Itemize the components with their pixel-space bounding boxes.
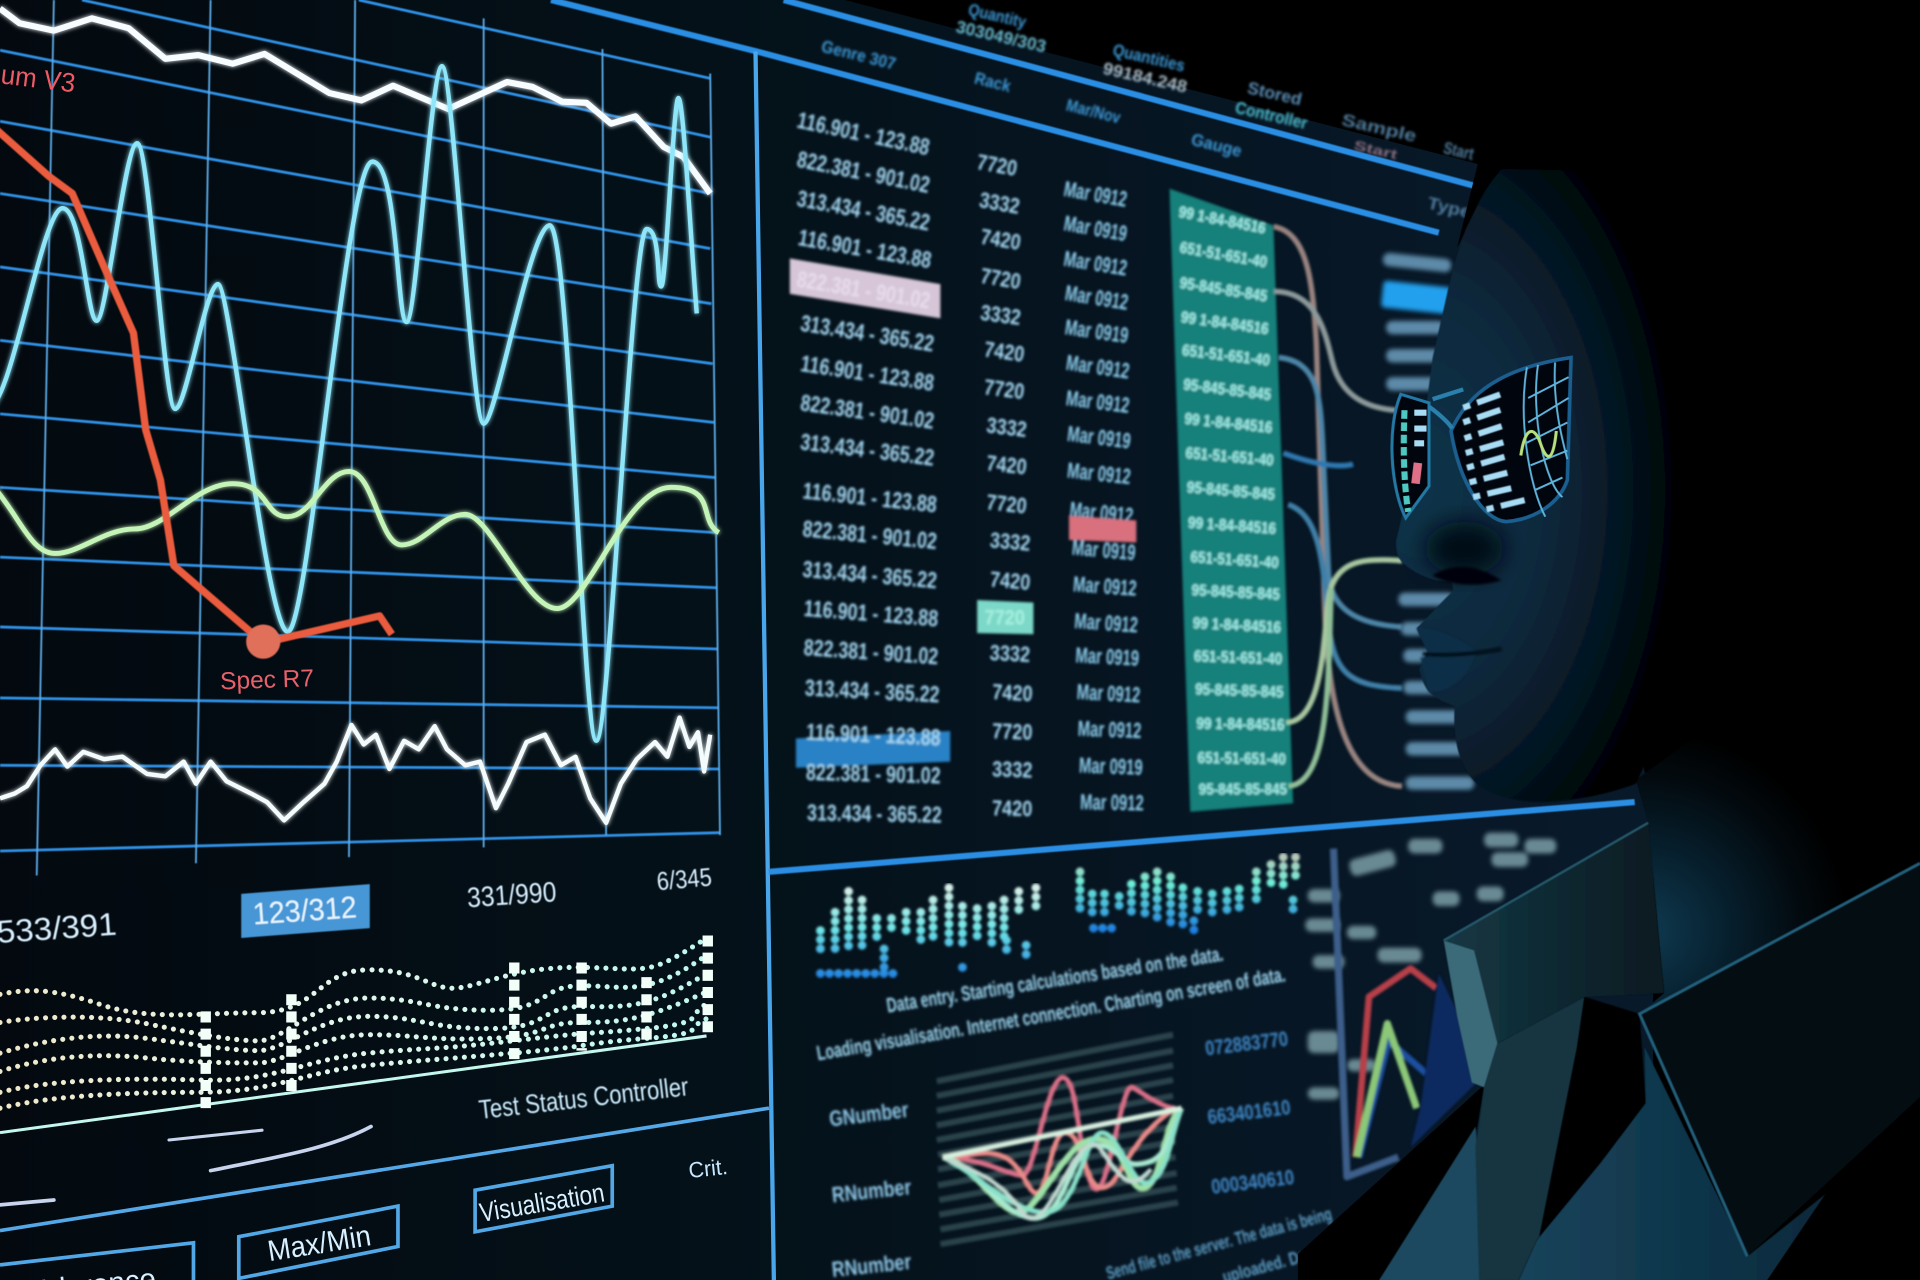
collar: left flap (1444, 823, 1664, 1043)
teal column rows: 99 1-84-84516 (1177, 204, 1267, 238)
chart row values (1204, 1028, 1295, 1199)
column: counts: 7720 (979, 263, 1023, 294)
column: ranges: 313.434 - 365.22 (799, 310, 936, 357)
header column names: Mar/Nov (1064, 95, 1123, 128)
header metrics: Type (1426, 193, 1473, 222)
line: white noisy series (0, 718, 710, 823)
teal column rows: 95-845-85-845 (1179, 275, 1268, 306)
column: ranges: 313.434 - 365.22 (804, 675, 940, 708)
column: ranges: 116.901 - 123.88 (796, 224, 933, 273)
teal column rows: 651-51-651-40 (1185, 445, 1274, 470)
column: dates: Mar 0912 (1063, 280, 1130, 315)
column: dates: Mar 0912 (1077, 716, 1142, 743)
button: Visualisation: Visualisation (477, 1178, 607, 1228)
column: ranges: 116.901 - 123.88 (795, 107, 932, 160)
header metrics: Quantity (966, 0, 1029, 32)
highlighted count (977, 600, 1033, 634)
column: counts: 3332 (989, 527, 1031, 556)
column: counts: 3332 (985, 412, 1028, 442)
marker: red point (246, 624, 280, 659)
side line chart (1333, 849, 1436, 1177)
right lens grid reflection (1524, 362, 1569, 517)
column: ranges: 116.901 - 123.88 (799, 350, 936, 396)
left lens reflection (1404, 410, 1427, 512)
column: dates: Mar 0919 (1075, 642, 1140, 671)
status text (815, 943, 1287, 1065)
black jacket band (1298, 1085, 1484, 1280)
column: ranges: 116.901 - 123.88 (805, 719, 941, 750)
column: ranges: 822.381 - 901.02 (806, 759, 941, 789)
column: dates: Mar 0912 (1076, 679, 1141, 708)
header metrics: Start (1352, 138, 1399, 162)
column: ranges: 822.381 - 901.02 (802, 515, 938, 554)
highlighted count: 7720 (984, 606, 1025, 629)
column: counts: 7720 (983, 374, 1026, 404)
nose shadow (1425, 522, 1504, 576)
shirt: lower body (1518, 1047, 1826, 1280)
column: dates: Mar 0919 (1066, 421, 1132, 454)
panel: lower right dashboard (815, 833, 1556, 1280)
column: counts: 7720 (985, 489, 1028, 519)
label: Spec R7: Spec R7 (220, 665, 314, 695)
column: dates: Mar 0912 (1062, 246, 1129, 281)
readout 123/312 highlighted (241, 884, 370, 938)
teal column rows: 651-51-651-40 (1197, 750, 1286, 768)
button: Max/Min (239, 1206, 398, 1278)
line: cyan wave series (0, 66, 697, 741)
lower right dark shadow (1767, 1097, 1920, 1280)
status text: Loading visualisation. Internet connection. Charting on screen of data. (815, 963, 1287, 1065)
column: ranges: 313.434 - 365.22 (802, 556, 938, 593)
chart row values: 072883770 (1204, 1028, 1289, 1060)
column: ranges: 822.381 - 901.02 (799, 389, 936, 434)
right lens (1451, 358, 1571, 522)
collar: right flap lit edges (1640, 863, 1920, 1256)
column: counts: 3332 (989, 640, 1031, 667)
right lens green wave reflection (1521, 431, 1556, 456)
column: dates: Mar 0912 (1074, 608, 1139, 638)
chart: dotted wave bands (0, 936, 708, 1133)
column: dates: Mar 0919 (1062, 211, 1129, 246)
highlighted row: pale pink (790, 258, 940, 318)
nostril (1433, 567, 1501, 585)
readout 6/345: 6/345 (656, 863, 713, 896)
lips (1417, 628, 1501, 692)
column: ranges: 822.381 - 901.02 (795, 146, 932, 198)
header column names: Genre 307 (819, 36, 898, 74)
column: ranges: 313.434 - 365.22 (795, 185, 932, 236)
column: dates: Mar 0912 (1072, 571, 1138, 601)
column: counts: 3332 (992, 756, 1033, 783)
column: counts: 7420 (983, 337, 1026, 367)
left lens (1392, 394, 1429, 518)
column: counts: 7420 (979, 224, 1023, 255)
neck (1636, 722, 1920, 1014)
column: counts: 7420 (992, 796, 1033, 821)
right lens table reflection (1463, 386, 1527, 509)
chart grid (0, 0, 720, 876)
teal column rows: 99 1-84-84516 (1192, 615, 1281, 637)
header column names (819, 36, 1244, 161)
header metrics: Start (1442, 137, 1476, 164)
chart row labels: GNumber (828, 1097, 910, 1131)
shirt: left panel (1379, 1127, 1482, 1280)
column: dates: Mar 0912 (1062, 176, 1129, 212)
status text: Data entry. Starting calculations based on the data. (885, 943, 1225, 1018)
wave chart with stripes (937, 1035, 1182, 1244)
teal column rows: 99 1-84-84516 (1187, 515, 1277, 538)
teal column rows: 95-845-85-845 (1195, 681, 1284, 701)
header metrics: Quantities (1111, 40, 1187, 76)
panel: teal column (1169, 189, 1293, 812)
header metrics: Controller (1233, 97, 1310, 133)
sparkline strokes (0, 1127, 371, 1205)
teal column rows: 99 1-84-84516 (1196, 716, 1285, 734)
collar: left flap lit top edge (1444, 823, 1648, 940)
side chart labels (1305, 833, 1556, 1100)
column: counts: 7720 (992, 718, 1033, 745)
chart node columns (206, 936, 708, 1108)
dot bar cluster 1 (820, 888, 1036, 975)
list: right side entries (1381, 252, 1474, 790)
panel: data table (790, 107, 1144, 828)
chart row labels (828, 1097, 913, 1280)
button: Max/Min: Max/Min (265, 1219, 373, 1268)
column: ranges: 822.381 - 901.02 (803, 634, 939, 669)
header metrics: 99184.248 (1101, 58, 1189, 97)
column: dates: Mar 0912 (1080, 789, 1144, 816)
frame lines (551, 0, 1635, 1280)
highlighted row: pale pink: 822.381 - 901.02 (795, 266, 932, 314)
highlighted date: red (1069, 516, 1136, 542)
teal column rows: 95-845-85-845 (1186, 479, 1276, 504)
button: tolerance (0, 1243, 193, 1280)
column: counts: 7720 (975, 149, 1019, 181)
face (1396, 169, 1739, 802)
column: counts (975, 149, 1033, 821)
dot bar cluster 2 (1080, 857, 1296, 933)
column: dates: Mar 0912 (1065, 385, 1131, 418)
teal column rows: 651-51-651-40 (1178, 239, 1268, 272)
line: red series (0, 127, 392, 643)
header metrics: Stored (1246, 77, 1304, 109)
column: ranges: 313.434 - 365.22 (807, 799, 942, 828)
panel: left line chart (0, 0, 720, 876)
line: green series (0, 471, 719, 609)
teal column rows: 651-51-651-40 (1181, 342, 1271, 370)
teal column rows (1177, 204, 1287, 799)
teal column rows: 99 1-84-84516 (1180, 309, 1270, 338)
highlighted row: blue (796, 731, 950, 768)
column: counts: 7420 (992, 679, 1033, 706)
bridge (1429, 389, 1463, 429)
column: ranges: 116.901 - 123.88 (803, 595, 939, 631)
panel: bottom-left controls (0, 1108, 769, 1280)
header metrics: Sample (1340, 109, 1418, 146)
hair (1457, 0, 1920, 367)
column: dates: Mar 0912 (1066, 458, 1132, 489)
column: dates: Mar 0919 (1063, 314, 1130, 348)
column: counts: 7420 (989, 567, 1031, 595)
header column names: Rack (973, 68, 1013, 96)
label: um V3: um V3 (0, 59, 77, 98)
label: Crit.: Crit. (687, 1154, 729, 1183)
column: ranges (795, 107, 942, 828)
teal column rows: 95-845-85-845 (1182, 376, 1272, 404)
teal column rows: 651-51-651-40 (1194, 648, 1283, 668)
chart baseline (0, 1036, 707, 1133)
sunglasses (1392, 358, 1571, 522)
header metrics: 303049/303 (954, 16, 1048, 56)
column: ranges: 116.901 - 123.88 (802, 477, 938, 517)
jacket blue reflection (1411, 973, 1477, 1147)
collar: left flap lit band (1444, 940, 1498, 1087)
teal column rows: 99 1-84-84516 (1184, 411, 1273, 437)
header metrics (954, 0, 1476, 222)
central shadow gap (1518, 997, 1646, 1280)
column: dates (1062, 176, 1144, 816)
panel: ratio readouts (0, 863, 713, 950)
column: dates: Mar 0919 (1079, 753, 1143, 780)
collar: right flap (1640, 863, 1920, 1256)
column: dates: Mar 0912 (1065, 350, 1131, 384)
column: dates: Mar 0912 (1068, 497, 1134, 528)
chart row values: 663401610 (1206, 1096, 1292, 1129)
footer status text (1104, 1203, 1334, 1280)
column: counts: 3332 (979, 300, 1022, 330)
chart row labels: RNumber (831, 1174, 913, 1207)
panel: header labels (819, 0, 1476, 222)
shirt: placket (1476, 997, 1584, 1280)
line: white top series (0, 9, 710, 193)
readout 123/312 highlighted: 123/312 (252, 890, 358, 931)
person (1298, 0, 1920, 1280)
connector curves (1273, 227, 1402, 786)
teal column rows: 95-845-85-845 (1199, 782, 1287, 799)
teal column rows: 651-51-651-40 (1190, 549, 1279, 572)
header column names: Gauge (1189, 129, 1244, 161)
chart row values: 000340610 (1210, 1166, 1295, 1199)
teal column rows: 95-845-85-845 (1191, 582, 1280, 604)
column: ranges: 313.434 - 365.22 (799, 429, 936, 471)
column: dates: Mar 0919 (1071, 535, 1137, 565)
readout 331/990: 331/990 (466, 876, 557, 913)
label: Test Status Controller: Test Status Controller (477, 1071, 690, 1125)
column: counts: 3332 (977, 187, 1022, 219)
column: counts: 7420 (985, 450, 1028, 479)
